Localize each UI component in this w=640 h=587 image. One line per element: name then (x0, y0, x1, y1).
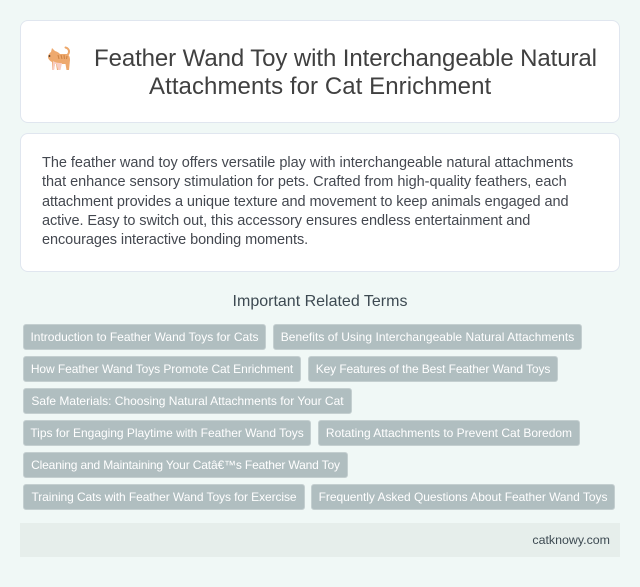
footer site name: catknowy.com (532, 533, 610, 547)
tag (23, 388, 352, 414)
footer bar (20, 523, 620, 557)
description text: active. Easy to switch out, this accessory ensures endless entertainment and (42, 213, 530, 229)
tag (273, 324, 582, 350)
description text: The feather wand toy offers versatile play with interchangeable natural attachments (42, 155, 573, 171)
tag: Safe Materials: Choosing Natural Attachments for Your Cat (31, 394, 344, 408)
description text: that enhance sensory stimulation for pets. Crafted from high-quality feathers, each (42, 174, 567, 190)
tag: Frequently Asked Questions About Feather Wand Toys (319, 490, 607, 504)
tag (318, 420, 580, 446)
tag (23, 356, 301, 382)
related terms heading: Important Related Terms (233, 293, 407, 310)
tag (23, 452, 348, 478)
description text: encourages interactive bonding moments. (42, 232, 308, 248)
tag (23, 324, 266, 350)
tag (23, 484, 305, 510)
tag: Cleaning and Maintaining Your Catâ€™s Feather Wand Toy (31, 458, 340, 472)
related terms tags (23, 324, 615, 510)
tag: Key Features of the Best Feather Wand Toys (316, 362, 550, 376)
title: Attachments for Cat Enrichment (149, 73, 491, 100)
description panel (20, 133, 620, 272)
tag: Rotating Attachments to Prevent Cat Boredom (326, 426, 572, 440)
description text: attachment provides a unique texture and movement to keep animals engaged and (42, 194, 568, 210)
tag (308, 356, 558, 382)
title (94, 45, 597, 100)
description text (42, 155, 573, 248)
icon: cat (48, 46, 70, 70)
tag: Introduction to Feather Wand Toys for Cats (30, 330, 259, 344)
tag: Tips for Engaging Playtime with Feather Wand Toys (30, 426, 304, 440)
tag (23, 420, 311, 446)
tag (311, 484, 615, 510)
title: Feather Wand Toy with Interchangeable Natural (94, 45, 597, 72)
header panel (20, 20, 620, 123)
tag: How Feather Wand Toys Promote Cat Enrichment (31, 362, 293, 376)
tag: Training Cats with Feather Wand Toys for Exercise (31, 490, 297, 504)
tag: Benefits of Using Interchangeable Natural Attachments (281, 330, 574, 344)
